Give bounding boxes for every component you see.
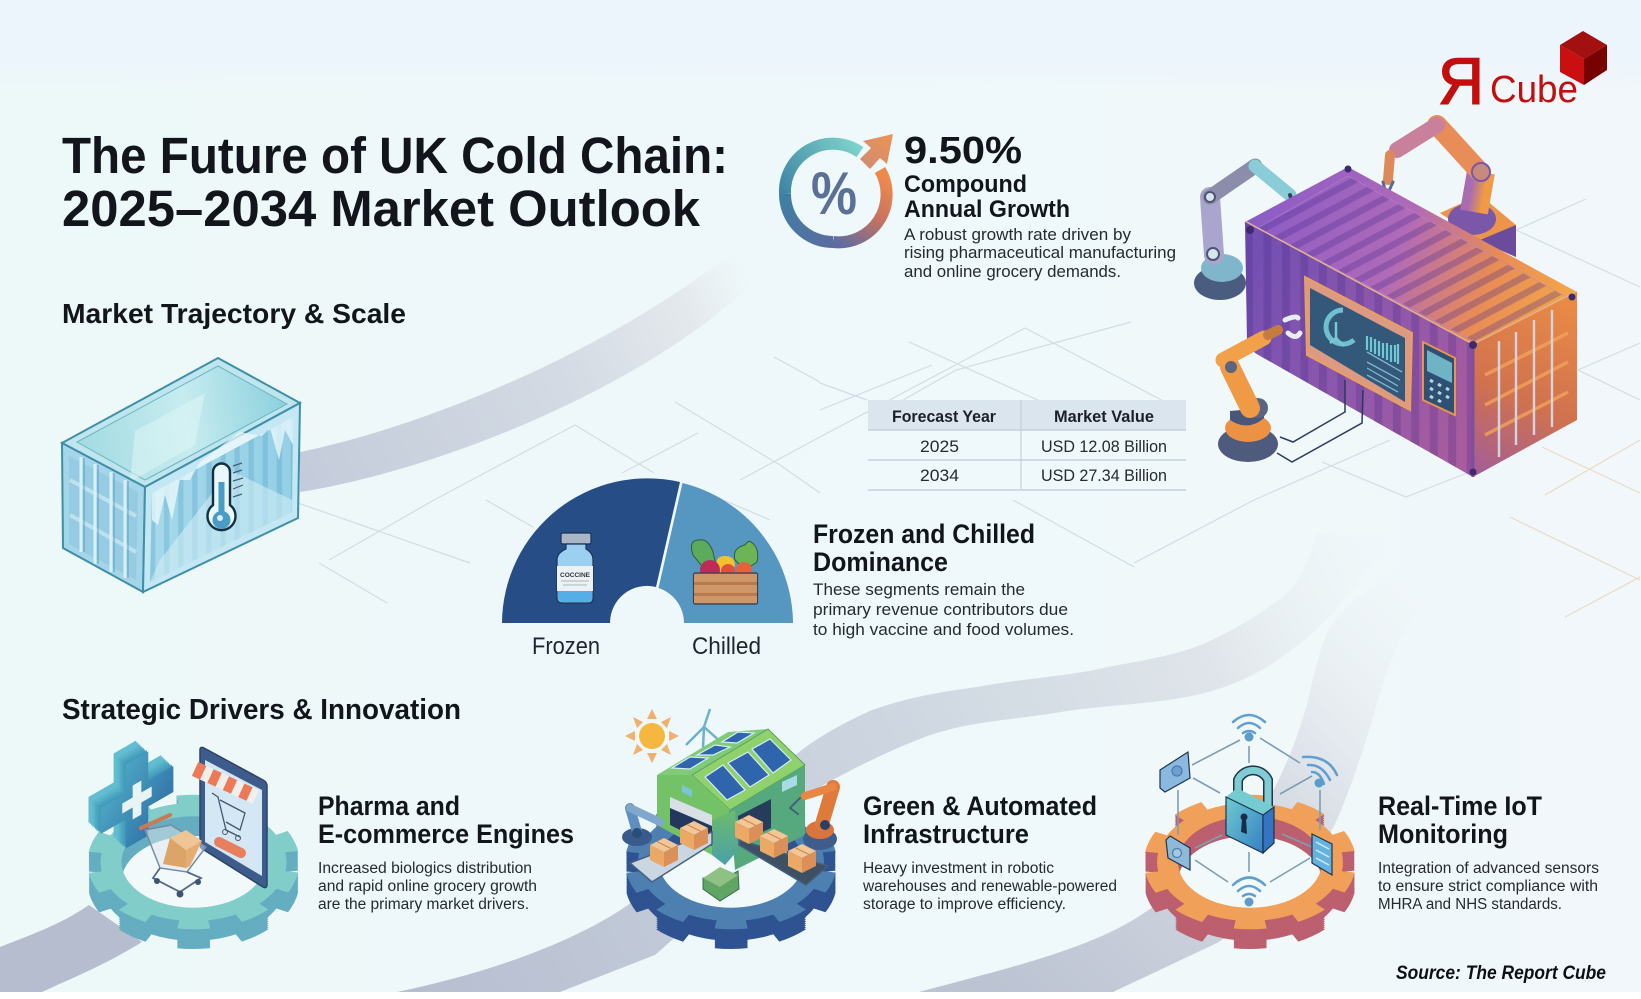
text block: frozen and chilled dominance: These segments remain the — [813, 580, 1025, 599]
text block: real-time IoT: Integration of advanced sensors — [1378, 860, 1599, 877]
stat: CAGR: 9.50% — [904, 130, 1022, 172]
legend labels — [532, 633, 761, 660]
illustration: smart container with robot arms — [1194, 125, 1577, 477]
icon: vegetable crate — [691, 540, 758, 604]
text block: green and automated: Infrastructure — [863, 819, 1029, 849]
network links — [1178, 738, 1320, 882]
background grid lines — [298, 199, 1640, 617]
background ribbon: right — [919, 555, 1450, 992]
corner castings — [1246, 166, 1576, 476]
thermometer — [208, 463, 243, 530]
arrow — [860, 134, 893, 169]
icon: real-time IoT gear — [1152, 715, 1348, 944]
text block: frozen and chilled dominance: Dominance — [813, 547, 948, 577]
logo wordmark — [1438, 44, 1578, 118]
segment: chilled — [658, 483, 793, 623]
table: forecast: Market Value — [1054, 407, 1154, 426]
text block: pharma and e-commerce: and rapid online grocery growth — [318, 878, 537, 895]
legend labels: Chilled — [692, 633, 761, 660]
container long side — [1245, 222, 1473, 477]
robot arm: orange back — [1383, 125, 1516, 257]
table: forecast: 2025 — [920, 437, 959, 456]
table: forecast: USD 27.34 Billion — [1041, 466, 1167, 485]
title — [62, 127, 728, 237]
chart: frozen vs chilled semicircle — [502, 478, 793, 660]
blue robot arm — [622, 808, 660, 846]
text block: pharma and e-commerce: E-commerce Engines — [318, 819, 574, 849]
heading: strategic drivers: Strategic Drivers & Innovation — [62, 694, 461, 726]
small green crate — [703, 867, 739, 901]
parcels — [650, 815, 816, 873]
title: The Future of UK Cold Chain: — [62, 127, 728, 184]
text block: pharma and e-commerce: Increased biologics distribution — [318, 860, 532, 877]
container door face — [62, 443, 145, 592]
control panel — [1423, 342, 1455, 415]
monitor screen — [1305, 277, 1412, 410]
text block: real-time IoT: Monitoring — [1378, 819, 1508, 849]
stat: CAGR: Compound — [904, 171, 1027, 198]
text block: real-time IoT — [1378, 791, 1599, 913]
text block: green and automated: storage to improve efficiency. — [863, 896, 1066, 913]
cables — [1277, 380, 1363, 462]
background ribbon: upper — [300, 248, 756, 492]
text block: real-time IoT: Real-Time IoT — [1378, 791, 1542, 821]
gear base — [633, 800, 829, 944]
text block: pharma and e-commerce: Pharma and — [318, 791, 460, 821]
logo cube — [1560, 31, 1607, 85]
container door end — [1473, 292, 1577, 477]
sensor devices — [1160, 752, 1332, 875]
solar panels — [672, 732, 791, 800]
text block: real-time IoT: MHRA and NHS standards. — [1378, 896, 1562, 913]
warehouse building — [657, 729, 805, 870]
text block: green and automated: Heavy investment in robotic — [863, 860, 1054, 877]
text block: frozen and chilled dominance: Frozen and Chilled — [813, 519, 1035, 549]
wifi nodes — [1244, 732, 1324, 906]
icon: growth percent gauge — [785, 134, 893, 242]
text block: real-time IoT: to ensure strict compliance with — [1378, 878, 1598, 895]
orange robot arm — [790, 787, 837, 850]
table: forecast: USD 12.08 Billion — [1041, 437, 1167, 456]
segment: frozen — [502, 478, 680, 623]
text block: green and automated: Green & Automated — [863, 791, 1097, 821]
text block: frozen and chilled dominance — [813, 519, 1074, 639]
table: forecast — [868, 400, 1186, 490]
background ribbon: bottom left — [0, 905, 142, 992]
sun — [625, 709, 679, 763]
icon: vaccine vial — [557, 533, 593, 603]
background ribbon: middle — [397, 533, 1390, 992]
icon: glass refrigerated container — [62, 358, 300, 592]
stat: CAGR: and online grocery demands. — [904, 262, 1121, 281]
wind turbine — [686, 709, 722, 748]
text block: pharma and e-commerce: are the primary market drivers. — [318, 896, 529, 913]
logo wordmark: Cube — [1490, 69, 1578, 111]
heading: market trajectory: Market Trajectory & Scale — [62, 298, 406, 329]
title: 2025–2034 Market Outlook — [62, 180, 701, 237]
source note: Source: The Report Cube — [1396, 963, 1606, 984]
text block: green and automated — [862, 791, 1117, 913]
logo — [1438, 31, 1607, 118]
robot arm: orange front — [1218, 317, 1300, 462]
conveyors — [630, 832, 828, 885]
shopping cart — [141, 815, 206, 898]
text block: pharma and e-commerce — [318, 791, 574, 913]
table: forecast: 2034 — [920, 466, 959, 485]
legend labels: Frozen — [532, 633, 600, 660]
tablet with store — [195, 747, 267, 888]
container roof — [1245, 167, 1577, 345]
padlock — [1226, 770, 1274, 853]
icon: pharma and e-commerce gear — [89, 719, 292, 944]
logo wordmark: Я — [1438, 44, 1484, 118]
text block: green and automated: warehouses and renewable-powered — [862, 878, 1117, 895]
stat: CAGR — [904, 130, 1176, 281]
wifi signals — [1233, 715, 1337, 896]
icon: vaccine vial: COCCINE — [560, 572, 590, 579]
icon: growth percent gauge: % — [811, 160, 857, 227]
gear base — [1152, 800, 1348, 944]
text block: frozen and chilled dominance: primary revenue contributors due — [813, 600, 1068, 619]
robot arm: grey blue — [1194, 166, 1298, 300]
stat: CAGR: rising pharmaceutical manufacturing — [904, 243, 1176, 262]
stat: CAGR: Annual Growth — [904, 196, 1070, 223]
icon: green automated warehouse gear — [622, 709, 837, 944]
text block: frozen and chilled dominance: to high vaccine and food volumes. — [813, 620, 1074, 639]
medical cross — [89, 719, 173, 870]
container side face — [143, 403, 300, 592]
gear base — [96, 800, 292, 944]
stat: CAGR: A robust growth rate driven by — [904, 225, 1131, 244]
table: forecast: Forecast Year — [892, 407, 996, 426]
